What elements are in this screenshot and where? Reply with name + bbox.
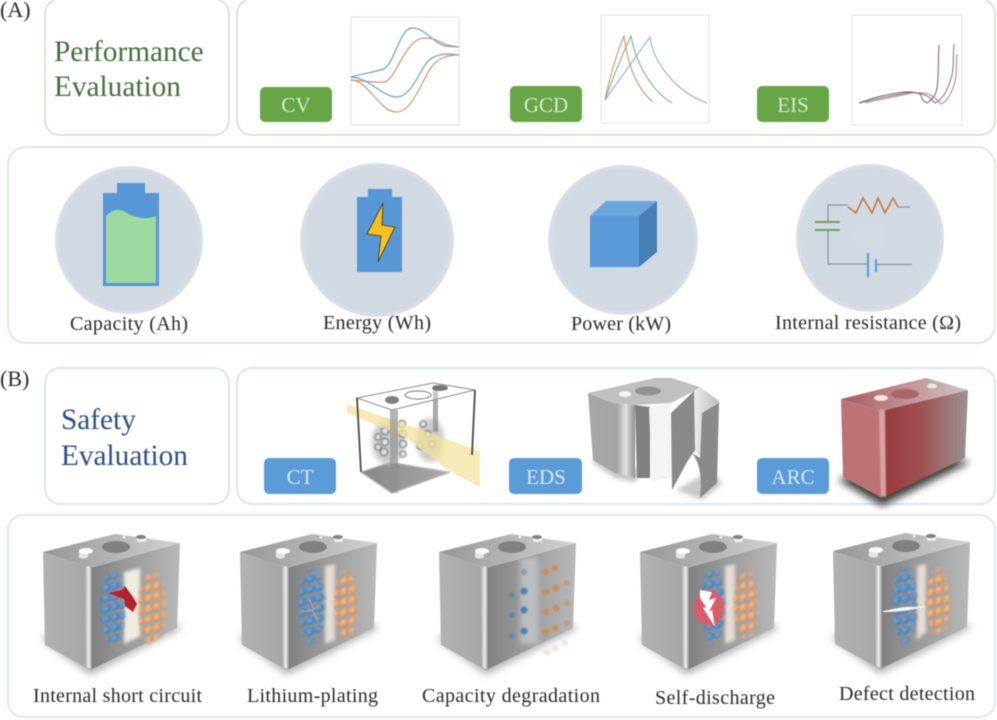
chart: GCD curves — [601, 15, 709, 123]
cell: defect detection — [832, 533, 972, 674]
badge: CV — [260, 87, 332, 122]
chart: CV curves — [351, 17, 459, 125]
illustration: exploded cell layers — [588, 378, 722, 500]
badge: CT — [264, 458, 336, 494]
label: internal resistance: Internal resistance (Ω) — [775, 312, 961, 334]
label: internal short circuit: Internal short circuit — [33, 685, 202, 707]
panel: safety issues — [8, 515, 995, 717]
badge: EDS: EDS — [526, 465, 566, 489]
heading: Performance Evaluation: Performance — [54, 36, 204, 68]
panel: performance evaluation title — [45, 0, 229, 135]
badge: EIS — [757, 86, 829, 122]
illustration: red heated cell — [838, 378, 970, 506]
panel: performance metrics — [8, 147, 995, 343]
panel: safety evaluation title — [45, 368, 229, 504]
icon: energy battery — [300, 163, 454, 317]
icon: power cube — [548, 165, 698, 315]
cell: internal short circuit — [42, 534, 182, 675]
heading: Safety Evaluation: Evaluation — [61, 440, 188, 472]
label: self-discharge: Self-discharge — [655, 687, 775, 709]
cell: capacity degradation — [438, 534, 578, 675]
label: power: Power (kW) — [571, 313, 671, 335]
heading: Performance Evaluation: Evaluation — [54, 71, 181, 103]
badge: EDS — [509, 458, 582, 494]
illustration: CT scan of cell — [347, 383, 480, 493]
label: energy: Energy (Wh) — [323, 312, 431, 334]
badge: ARC — [757, 458, 829, 494]
section label B: (B) — [0, 366, 29, 391]
panel: electrochemical tests — [237, 0, 995, 135]
panel: safety tests — [237, 368, 995, 506]
badge: ARC: ARC — [771, 465, 815, 489]
badge: EIS: EIS — [777, 93, 809, 117]
icon: capacity battery — [55, 166, 203, 314]
badge: GCD — [510, 86, 582, 122]
badge: GCD: GCD — [524, 93, 568, 117]
label: defect detection: Defect detection — [839, 683, 975, 705]
cell: self-discharge — [639, 534, 779, 675]
label: lithium plating: Lithium-plating — [247, 685, 378, 707]
badge: CT: CT — [287, 465, 314, 489]
label: capacity: Capacity (Ah) — [70, 313, 188, 335]
cell: lithium plating — [239, 534, 379, 675]
label: capacity degradation: Capacity degradation — [422, 685, 600, 707]
badge: CV: CV — [281, 93, 311, 117]
chart: EIS curves — [852, 15, 962, 125]
icon: circuit — [796, 164, 944, 312]
heading: Safety Evaluation: Safety — [61, 404, 136, 436]
